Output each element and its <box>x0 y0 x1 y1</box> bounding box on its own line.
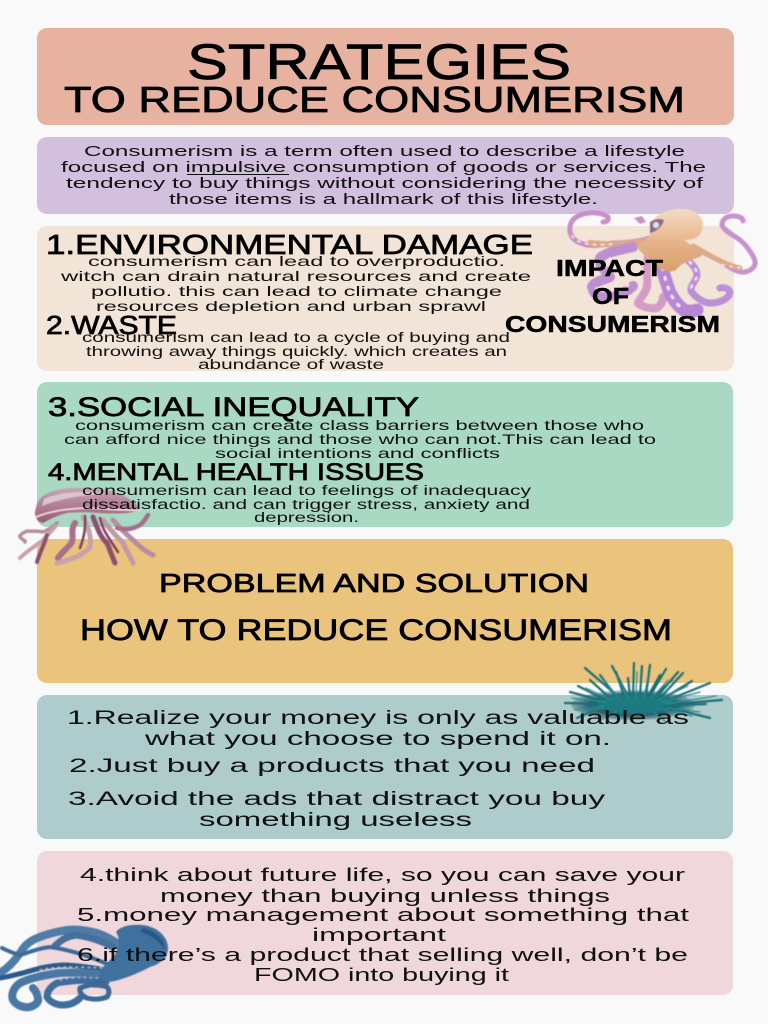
text block: environmental damage: witch can drain natural resources and create <box>59 268 531 284</box>
text block: introduction <box>61 143 706 208</box>
heading: to reduce consumerism: TO REDUCE CONSUMERISM <box>64 79 685 120</box>
section: waste <box>46 312 510 372</box>
text block: social inequality: can afford nice things and those who can not.This can lead to <box>64 431 656 447</box>
text block: solutions 1 to 3: something useless <box>199 810 472 831</box>
illustration: pink and orange octopus <box>570 209 755 311</box>
heading: how to reduce consumerism: HOW TO REDUCE CONSUMERISM <box>80 614 672 647</box>
text block: waste: abundance of waste <box>198 357 384 372</box>
section: mental health issues <box>48 459 531 525</box>
text block: introduction: those items is a hallmark of this lifestyle. <box>169 191 598 208</box>
panel: introduction <box>37 137 734 214</box>
heading: waste: 2.WASTE <box>46 312 177 340</box>
text block: waste <box>82 330 510 372</box>
panel: solutions 1 to 3 <box>37 695 733 839</box>
illustration: jellyfish <box>20 488 153 563</box>
text block: solutions 4 to 6: 5.money management about something that <box>77 905 689 925</box>
section: social inequality <box>48 392 656 461</box>
text block: mental health issues <box>82 483 531 525</box>
heading: environmental damage: 1.ENVIRONMENTAL DAMAGE <box>46 229 533 260</box>
text block: social inequality: social intentions and conflicts <box>215 445 500 461</box>
heading: impact of consumerism <box>505 255 720 337</box>
heading: problem and solution: PROBLEM AND SOLUTION <box>159 568 589 598</box>
illustration: blue octopus <box>0 925 168 1007</box>
heading: strategies: STRATEGIES <box>187 34 571 90</box>
text block: solutions 1 to 3: what you choose to spend it on. <box>143 729 611 750</box>
text block: solutions 1 to 3 <box>67 708 689 831</box>
text block: solutions 1 to 3: 2.Just buy a products that you need <box>69 756 595 777</box>
text block: waste: consumerism can lead to a cycle of buying and <box>82 330 510 345</box>
text block: solutions 4 to 6: important <box>312 925 446 945</box>
text block: waste: throwing away things quickly. which creates an <box>86 344 507 359</box>
text block: environmental damage: consumerism can lead to overproductio. <box>88 253 505 269</box>
panel: problem and solution <box>37 539 733 683</box>
title <box>64 34 685 120</box>
panel: social inequality and mental health <box>37 382 733 527</box>
text block: introduction: focused on impulsive consumption of goods or services. The <box>61 159 706 176</box>
text block: environmental damage: pollutio. this can lead to climate change <box>91 283 502 299</box>
text block: introduction: Consumerism is a term often used to describe a lifestyle <box>84 143 685 160</box>
text block: social inequality <box>64 417 656 461</box>
text block: solutions 4 to 6: 4.think about future life, so you can save your <box>80 865 685 885</box>
panel: solutions 4 to 6 <box>37 851 733 995</box>
panel: environmental damage and waste <box>37 226 734 371</box>
heading: impact of consumerism: OF <box>592 283 629 309</box>
panel: title <box>37 28 734 125</box>
text block: solutions 4 to 6: FOMO into buying it <box>254 965 509 985</box>
heading: social inequality: 3.SOCIAL INEQUALITY <box>48 392 419 422</box>
text block: solutions 1 to 3: 1.Realize your money is only as valuable as <box>67 708 689 729</box>
text block: mental health issues: depression. <box>254 510 359 525</box>
text block: introduction: tendency to buy things without considering the necessity of <box>66 175 704 192</box>
text block: solutions 4 to 6 <box>77 865 689 985</box>
text block: environmental damage <box>59 253 531 314</box>
illustration: teal sea urchin <box>565 663 722 722</box>
text block: mental health issues: consumerism can lead to feelings of inadequacy <box>82 483 531 498</box>
text block: social inequality: consumerism can create class barriers between those who <box>75 417 644 433</box>
heading: mental health issues: 4.MENTAL HEALTH ISSUES <box>48 459 424 486</box>
text block: solutions 1 to 3: 3.Avoid the ads that distract you buy <box>68 789 606 810</box>
text block: mental health issues: dissatisfactio. and can trigger stress, anxiety and <box>82 497 530 512</box>
text block: solutions 4 to 6: money than buying unless things <box>160 886 610 906</box>
heading: impact of consumerism: IMPACT <box>556 255 663 281</box>
text block: environmental damage: resources depletion and urban sprawl <box>96 298 486 314</box>
text block: solutions 4 to 6: 6.if there’s a product that selling well, don’t be <box>77 945 688 965</box>
heading: impact of consumerism: CONSUMERISM <box>505 311 720 337</box>
section: environmental damage <box>46 229 533 314</box>
